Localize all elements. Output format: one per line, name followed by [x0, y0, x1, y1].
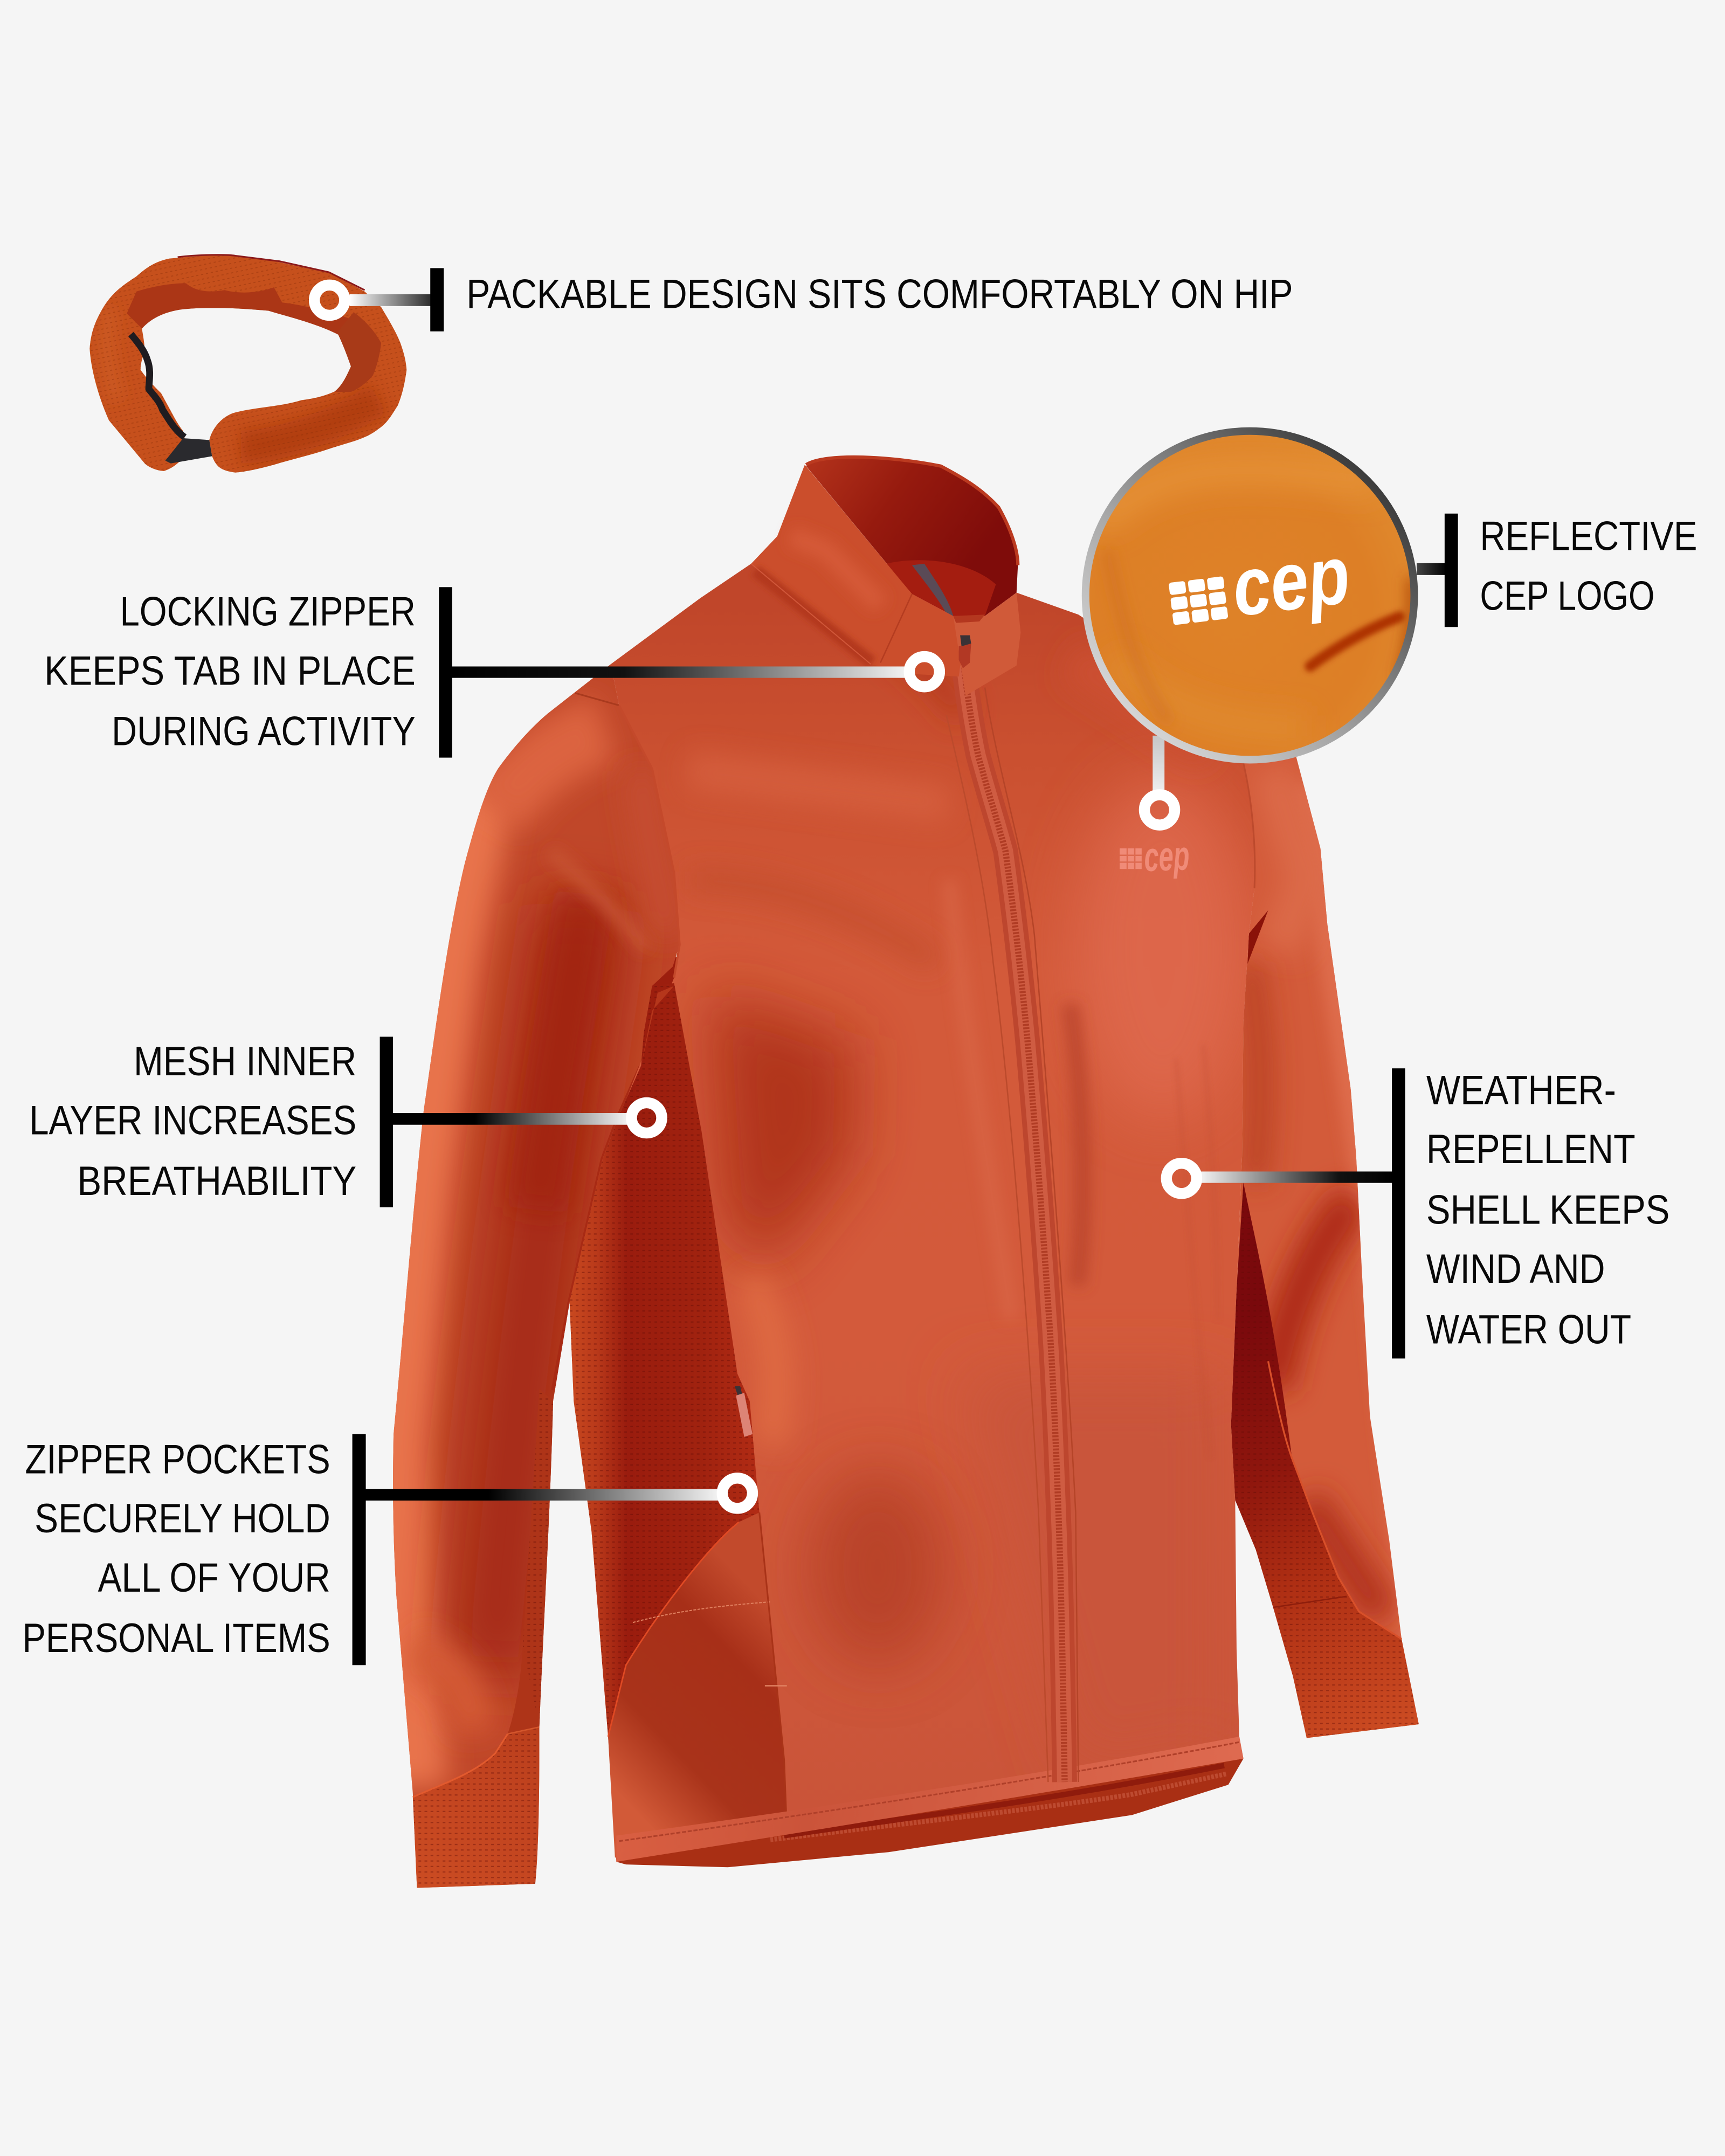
text: reflective cep logo — [1480, 513, 1697, 619]
text: weather-repellent shell: WATER OUT — [1426, 1307, 1631, 1352]
ring marker — [722, 1478, 753, 1508]
jacket illustration — [385, 457, 1437, 1897]
collar — [751, 457, 1020, 696]
disc gradient rim — [1086, 431, 1414, 759]
text: zipper pockets — [22, 1436, 330, 1661]
jacket lining below hem — [616, 1759, 1244, 1867]
left sleeve — [385, 660, 688, 1897]
ring marker on chest logo — [1144, 794, 1175, 825]
ring marker — [1167, 1163, 1197, 1193]
zipper slider — [959, 644, 971, 668]
leader line — [451, 666, 907, 678]
logo grid and wordmark: cep — [1227, 528, 1355, 634]
text: weather-repellent shell: SHELL KEEPS — [1426, 1187, 1669, 1233]
mesh side panel — [570, 983, 787, 1832]
packable jacket pouch — [83, 247, 413, 481]
armpit underlay — [636, 957, 688, 1086]
callout: zipper pockets — [22, 1434, 753, 1665]
text: mesh inner layer: MESH INNER — [134, 1039, 356, 1084]
bar — [430, 268, 444, 331]
text: locking zipper — [44, 589, 416, 755]
text: locking zipper: KEEPS TAB IN PLACE — [44, 648, 416, 694]
bar — [380, 1036, 393, 1207]
text: zipper pockets: ZIPPER POCKETS — [25, 1436, 330, 1482]
armhole seam — [619, 706, 680, 978]
text: mesh inner layer — [29, 1039, 356, 1204]
fabric shading on front — [688, 591, 1250, 1774]
leader line — [392, 1113, 629, 1125]
callout: reflective logo zoom — [1086, 431, 1697, 825]
text: weather-repellent shell: REPELLENT — [1426, 1127, 1636, 1172]
pouch right lining — [334, 312, 381, 392]
text: zipper pockets: ALL OF YOUR — [98, 1555, 330, 1601]
bar — [353, 1434, 366, 1665]
collar interior — [806, 458, 1018, 616]
callout: packable design — [314, 268, 1293, 331]
inner neck lining — [886, 560, 996, 616]
leader line — [1199, 1171, 1393, 1183]
pocket zipper pull — [735, 1386, 753, 1437]
text: packable design: PACKABLE DESIGN SITS COMFORTABLY ON HIP — [466, 271, 1293, 317]
text: mesh inner layer: LAYER INCREASES — [29, 1098, 356, 1144]
collar left front panel — [751, 465, 963, 676]
connector to chest logo — [1153, 736, 1164, 798]
text: weather-repellent shell — [1426, 1067, 1669, 1352]
bar — [439, 587, 452, 758]
text: weather-repellent shell: WIND AND — [1426, 1246, 1605, 1292]
left sleeve mesh strip and cuff — [413, 1389, 553, 1888]
magnified logo disc — [1086, 431, 1414, 759]
leader and bar — [1417, 514, 1458, 627]
pouch outer body — [83, 247, 413, 481]
right sleeve — [1231, 757, 1419, 1738]
main zipper and placket — [947, 657, 1079, 1782]
jacket front body — [564, 550, 1307, 1870]
small cep chest logo: cep — [1143, 833, 1190, 880]
text: weather-repellent shell: WEATHER- — [1426, 1067, 1616, 1113]
right sleeve mesh panel and cuff — [1231, 1183, 1419, 1738]
small cep chest logo — [1120, 833, 1190, 880]
bar — [1392, 1068, 1405, 1358]
text: mesh inner layer: BREATHABILITY — [77, 1158, 356, 1204]
ring marker — [631, 1103, 662, 1133]
pouch inner lining — [127, 284, 351, 335]
leader line — [349, 294, 432, 306]
collar right front panel — [953, 592, 1020, 696]
text: reflective cep logo: CEP LOGO — [1480, 573, 1654, 619]
text: locking zipper: DURING ACTIVITY — [112, 709, 416, 755]
callout: weather-repellent shell — [1167, 1067, 1669, 1358]
text: zipper pockets: SECURELY HOLD — [34, 1496, 330, 1542]
pouch black strap — [131, 334, 184, 437]
logo grid and wordmark — [1164, 528, 1355, 641]
callout: locking zipper — [44, 587, 940, 758]
pouch elastic buckle — [165, 438, 212, 464]
leader line — [365, 1489, 720, 1501]
text: locking zipper: LOCKING ZIPPER — [120, 589, 416, 635]
neck tape — [912, 564, 953, 616]
lower side panel — [608, 1512, 787, 1857]
ring marker — [314, 285, 344, 315]
callout: mesh inner layer — [29, 1036, 662, 1207]
text: zipper pockets: PERSONAL ITEMS — [22, 1615, 330, 1661]
hem band — [616, 1737, 1244, 1862]
ring marker — [909, 657, 940, 687]
